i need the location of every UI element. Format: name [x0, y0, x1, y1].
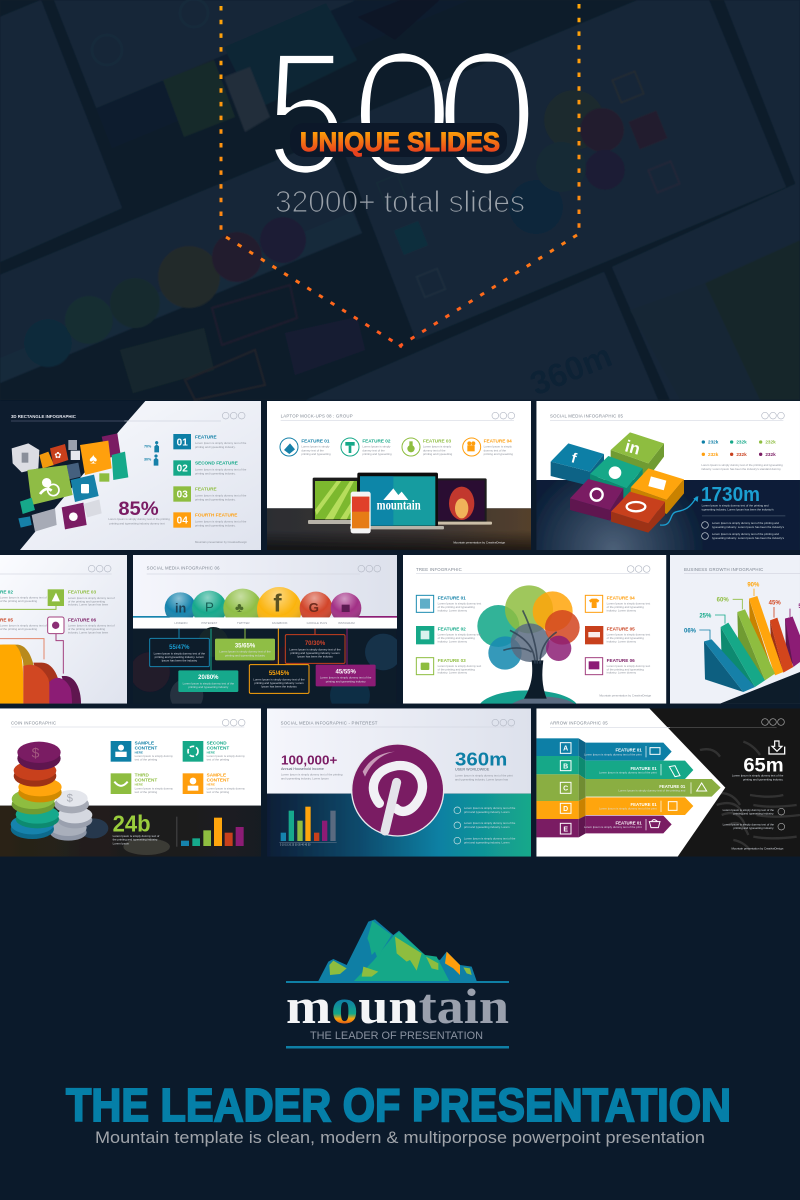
- feature rows: FEATURE: [195, 487, 217, 492]
- 65m stat: 65m: [743, 755, 784, 776]
- panel: 3D rectangle infographic slide: 3D RECTANGLE INFOGRAPHIC: [11, 414, 76, 419]
- content blocks: Lorem Ipsum is simply dummy: [207, 786, 245, 790]
- 3D cube cluster: ✿: [54, 450, 62, 460]
- percentage boxes: 55/47%: [169, 645, 190, 651]
- four feature icons: dummy text of the: [362, 448, 385, 452]
- 65m stat: Mountain presentation by CreativeDesign: [731, 847, 784, 851]
- panel: arrow infographic slide: ARROW INFOGRAPHIC 05: [550, 721, 608, 726]
- percentage boxes: 70/30%: [305, 641, 326, 647]
- percentage boxes: Lorem Ipsum is simply dummy text of the: [183, 681, 234, 685]
- 3D cube cluster: ♠: [89, 451, 97, 467]
- content blocks: CONTENT: [135, 745, 157, 750]
- panel: stacked dome features slide: Lorem Ipsum is simply dummy text of: [0, 624, 47, 628]
- four feature icons: FEATURE 04: [484, 439, 512, 444]
- feature rows: printing and typesetting industry.: [195, 523, 236, 527]
- panel: laptop mock-ups slide: [267, 401, 531, 550]
- panel: social media infographic 06 slide: INSTAGRAM: [338, 621, 355, 625]
- feature arrows: Lorem Ipsum is simply dummy text of the printing and: [618, 789, 686, 793]
- panel: 3D rectangle infographic slide: Mountain presentation by CreativeDesign: [195, 540, 247, 544]
- panel: pinterest infographic slide: [267, 708, 531, 857]
- 232k stats and 1730m figure: industry. Lorem Ipsum has been the industry's standard dummy: [701, 467, 781, 471]
- feature rows: Lorem Ipsum is simply dummy text of the: [195, 467, 247, 471]
- feature rows: Lorem Ipsum is simply dummy text of the: [195, 519, 247, 523]
- content blocks: CONTENT: [135, 777, 157, 782]
- 232k stats and 1730m figure: typesetting industry. Lorem Ipsum has been the industry's: [702, 507, 774, 511]
- right features: Lorem Ipsum is simply dummy text: [607, 602, 650, 606]
- panel: coin infographic slide: COIN INFOGRAPHIC: [11, 720, 56, 725]
- feature arrows: FEATURE 01: [659, 784, 686, 789]
- percentage boxes: Ipsum has been the industry: [162, 659, 198, 663]
- percentage boxes: printing and typesetting industry. Lorem: [290, 651, 340, 655]
- panel: stacked dome features slide: RE 05: [0, 618, 13, 623]
- headline: 500: 5: [266, 16, 347, 212]
- left features: industry. Lorem dummy: [438, 671, 468, 675]
- panel: stacked dome features slide: of the printing and typesetting: [0, 599, 38, 603]
- 24b stat: 24b: [113, 810, 151, 836]
- content blocks: SAMPLE: [207, 773, 226, 778]
- panel: social media infographic 06 slide: TWITTER: [237, 621, 250, 625]
- bar chart: 5 10 15 20 25 30 35 40 45 50: [280, 845, 311, 847]
- panel: pinterest infographic slide: SOCIAL MEDIA INFOGRAPHIC - PINTEREST: [281, 720, 378, 725]
- right features: Lorem Ipsum is simply dummy text: [607, 664, 650, 668]
- headline: 500: 0: [350, 15, 455, 211]
- four feature icons: dummy text of the: [301, 448, 324, 452]
- letter bands: C: [563, 785, 568, 792]
- bullet rows: print and typesetting industry. Lorem: [464, 810, 510, 814]
- percentage boxes: Lorem Ipsum is simply dummy text of the: [219, 650, 271, 654]
- 360m stat: [455, 752, 513, 781]
- feature rows: 04: [177, 516, 188, 527]
- panel: 3D rectangle infographic slide: 30%: [144, 458, 152, 462]
- bullet rows: Lorem Ipsum is simply dummy text of the: [464, 806, 516, 810]
- logo: mountain: [286, 919, 509, 1048]
- percentage boxes: Lorem Ipsum is simply dummy text of the: [289, 647, 341, 651]
- panel: social media infographic 06 slide: GOOGLE PLUS: [307, 621, 327, 625]
- content blocks: CONTENT: [207, 777, 229, 782]
- 65m stat: Lorem Ipsum is simply dummy text of the: [732, 773, 784, 777]
- 232k stats and 1730m figure: Lorem Ipsum is simply dummy text of the printing and typesetting: [701, 463, 783, 467]
- zebra texture: [700, 742, 800, 850]
- feature rows: Lorem Ipsum is simply dummy text of the: [195, 441, 247, 445]
- panel: coin infographic slide: Lorem Ipsum is simply dummy text of: [113, 834, 160, 838]
- feature rows: 03: [177, 490, 188, 501]
- 100,000+ stat: and typesetting industry. Lorem Ipsum: [281, 776, 329, 780]
- content blocks: Lorem Ipsum is simply dummy: [135, 786, 173, 790]
- right features: of the printing and typesetting: [607, 636, 644, 640]
- panel: stacked dome features slide: of the printing and typesetting: [68, 599, 106, 603]
- 65m stat: printing and typesetting industry.: [743, 777, 784, 781]
- feature rows: 01: [177, 437, 188, 448]
- four feature icons: Lorem Ipsum is simply: [484, 445, 512, 449]
- percentage labels: 45%: [769, 601, 781, 607]
- feature rows: FEATURE: [195, 434, 217, 439]
- social spheres: ♣: [235, 600, 244, 615]
- feature arrows: FEATURE 01: [631, 802, 657, 807]
- percentage boxes: 45/55%: [336, 669, 356, 675]
- heading: the leader of presentation: THE LEADER OF PRESENTATION: [66, 1079, 731, 1131]
- panel: laptop mock-ups slide: LAPTOP MOCK-UPS 08 : GROUP: [281, 414, 353, 419]
- four feature icons: printing and typesetting: [362, 452, 392, 456]
- panel: tree infographic slide: [403, 555, 666, 704]
- content blocks: text of the printing: [207, 758, 230, 762]
- four feature icons: printing and typesetting: [484, 452, 513, 456]
- letter bands: [536, 738, 586, 837]
- percentage boxes: printing and typesetting industry. Lorem: [254, 681, 304, 685]
- panel: stacked dome features slide: Lorem Ipsum is simply dummy text of: [68, 624, 115, 628]
- percentage boxes: printing and typesetting industry: [188, 685, 229, 689]
- left features: industry. Lorem dummy: [438, 608, 468, 612]
- right features: of the printing and typesetting: [607, 667, 644, 671]
- feature rows: [173, 434, 247, 528]
- percentage labels: [684, 583, 800, 640]
- devices: [308, 473, 492, 533]
- right features: FEATURE 06: [607, 658, 635, 663]
- 3D growth bars: [704, 596, 800, 704]
- four feature icons: FEATURE 01: [301, 439, 330, 444]
- tagline: Mountain template is clean, modern & multiporpose powerpoint presentation: [95, 1128, 705, 1147]
- panel: social media infographic 05 slide: [536, 401, 800, 550]
- letter bands: E: [563, 826, 568, 833]
- 65m stat: Lorem Ipsum is simply dummy text of the: [723, 822, 774, 826]
- content blocks: Lorem Ipsum is simply dummy: [207, 754, 245, 758]
- badge: unique slides: UNIQUE SLIDES: [300, 127, 500, 157]
- headline: 500: 0: [434, 15, 540, 211]
- panel: coin infographic slide: the printing and typesetting industry.: [113, 838, 158, 842]
- percentage boxes: printing and typesetting industry. Lorem: [155, 655, 205, 659]
- percentage boxes: Lorem Ipsum is simply dummy text of the: [253, 677, 305, 681]
- percentage boxes: Lorem Ipsum is simply dummy text of the: [154, 651, 205, 655]
- 360m stat: USER WORLDWIDE: [455, 768, 490, 772]
- panel: 3D rectangle infographic slide: [0, 401, 261, 550]
- panel: social media infographic 06 slide: FACEBOOK: [272, 621, 288, 625]
- percentage boxes: Lorem Ipsum is simply dummy text of the: [320, 676, 372, 680]
- tree: [477, 585, 580, 727]
- left features: Lorem Ipsum is simply dummy text: [438, 633, 481, 637]
- logo: mountain: mountain: [286, 978, 509, 1034]
- percentage boxes: Ipsum has been the industry: [261, 685, 297, 689]
- percentage boxes: printing and typesetting industry: [225, 653, 266, 657]
- letter bands: A: [563, 746, 568, 753]
- background: tilted slide collage: 360m: [525, 336, 617, 402]
- letter bands: B: [563, 763, 568, 770]
- bullet rows: print and typesetting industry. Lorem: [464, 825, 510, 829]
- left features: industry. Lorem dummy: [438, 639, 468, 643]
- panel: social media infographic 06 slide: LINKEDIN: [174, 621, 187, 625]
- four feature icons: Lorem Ipsum is simply: [362, 445, 391, 449]
- panel: laptop mock-ups slide: Mountain presentation by CreativeDesign: [453, 540, 506, 544]
- right features: [585, 595, 650, 675]
- 232k stats and 1730m figure: [660, 440, 785, 540]
- four feature icons: FEATURE 02: [362, 439, 391, 444]
- right features: industry. Lorem dummy: [607, 639, 637, 643]
- panel: stacked dome features slide: FEATURE 03: [68, 590, 97, 595]
- percentage labels: 25%: [699, 613, 712, 619]
- right features: Lorem Ipsum is simply dummy text: [607, 633, 650, 637]
- content blocks: [111, 741, 245, 794]
- social spheres: f: [273, 590, 282, 617]
- dome chart: [0, 645, 81, 704]
- panel: social media infographic 06 slide: [130, 555, 402, 715]
- subtitle: total slides: 32000+ total slides: [275, 184, 525, 219]
- feature arrows: FEATURE 01: [616, 820, 642, 825]
- 360m stat: Lorem Ipsum is simply dummy text of the print: [455, 774, 513, 778]
- bullet rows: Lorem Ipsum is simply dummy text of the: [464, 821, 516, 825]
- 100,000+ stat: Lorem Ipsum is simply dummy text of the printing: [281, 772, 343, 776]
- feature arrows: FEATURE 01: [631, 766, 657, 771]
- content blocks: HERE: [135, 751, 143, 755]
- panel: stacked dome features slide: industry. Lorem Ipsum has been: [68, 630, 109, 634]
- feature arrows: FEATURE 01: [616, 748, 642, 753]
- left features: [416, 595, 481, 675]
- content blocks: CONTENT: [207, 745, 229, 750]
- panel: coin infographic slide: [0, 708, 261, 857]
- panel: stacked dome features slide: [0, 555, 127, 704]
- four feature icons: dummy text of the: [484, 448, 507, 452]
- 65m stat: [723, 741, 785, 851]
- feature arrows: Lorem Ipsum is simply dummy text of the print: [599, 771, 657, 775]
- feature rows: SECOND FEATURE: [195, 461, 238, 466]
- bar chart: [177, 817, 244, 847]
- left features: FEATURE 01: [438, 596, 466, 601]
- devices: mountain: [377, 497, 421, 512]
- feature rows: 02: [177, 464, 188, 475]
- percentage boxes: printing and typesetting industry: [326, 679, 366, 683]
- 232k stats and 1730m figure: Lorem Ipsum is simply dummy text of the printing and: [712, 521, 779, 525]
- 360m stat: and typesetting industry. Lorem Ipsum has: [455, 778, 509, 782]
- feature arrows: Lorem Ipsum is simply dummy text of the print: [584, 752, 642, 756]
- 85% stat: 85%: [118, 499, 159, 520]
- panel: tree infographic slide: Mountain presentation by CreativeDesign: [599, 694, 652, 698]
- feature rows: printing and typesetting industry.: [195, 445, 236, 449]
- headline: 500: [266, 15, 540, 212]
- panel: social media infographic 06 slide: PINTEREST: [201, 621, 217, 625]
- 232k stats and 1730m figure: 1730m: [701, 484, 760, 506]
- four feature icons: printing and typesetting: [301, 452, 331, 456]
- percentage boxes: 55/45%: [269, 671, 290, 677]
- right features: FEATURE 04: [607, 596, 635, 601]
- 232k stats and 1730m figure: Lorem Ipsum is simply dummy text of the printing and: [712, 532, 779, 536]
- panel: 3D rectangle infographic slide: printing and typesetting industry dummy text: [109, 521, 165, 525]
- content blocks: text of the printing: [135, 790, 158, 794]
- percentage boxes: Ipsum has been the industry: [297, 655, 333, 659]
- 360m stat: 360m: [455, 749, 507, 770]
- icon: pinterest badge: [351, 743, 444, 837]
- coin stacks: $: [67, 793, 74, 805]
- isometric social tiles: in: [623, 437, 642, 459]
- right features: FEATURE 05: [607, 627, 635, 632]
- bar chart: [279, 807, 337, 847]
- panel: 3D rectangle infographic slide: 70%: [144, 444, 152, 448]
- right features: industry. Lorem dummy: [607, 608, 637, 612]
- 65m stat: printing and typesetting industry.: [733, 826, 774, 830]
- panel: arrow infographic slide: [536, 708, 800, 857]
- four feature icons: Lorem Ipsum is simply: [423, 445, 452, 449]
- panel: tree infographic slide: TREE INFOGRAPHIC: [416, 567, 462, 572]
- percentage boxes: 20/80%: [198, 675, 219, 681]
- right features: industry. Lorem dummy: [607, 671, 637, 675]
- 100,000+ stat: [281, 754, 343, 780]
- percentage boxes: 35/65%: [235, 643, 256, 649]
- panel: stacked dome features slide: RE 02: [0, 590, 13, 595]
- 232k stats and 1730m figure: 232k: [765, 440, 776, 445]
- feature arrows: Lorem Ipsum is simply dummy text of the print: [584, 825, 642, 829]
- background: tilted slide collage: [0, 0, 800, 402]
- logo: mountain: THE LEADER OF PRESENTATION: [310, 1030, 483, 1042]
- content blocks: text of the printing: [135, 758, 158, 762]
- content blocks: SECOND: [207, 741, 227, 746]
- panel: business growth infographic slide: BUSINESS GROWTH INFOGRAPHIC: [684, 567, 763, 572]
- content blocks: SAMPLE: [135, 741, 154, 746]
- panel: stacked dome features slide: Lorem Ipsum is simply dummy text of: [0, 596, 47, 600]
- content blocks: text of the printing: [207, 790, 230, 794]
- 232k stats and 1730m figure: 232k: [765, 452, 776, 457]
- feature rows: printing and typesetting industry.: [195, 497, 236, 501]
- left features: of the printing and typesetting: [438, 605, 475, 609]
- left features: of the printing and typesetting: [438, 667, 475, 671]
- panel: stacked dome features slide: FEATURE 06: [68, 618, 97, 623]
- 232k stats and 1730m figure: typesetting industry. Lorem Ipsum has been the industry's: [712, 536, 785, 540]
- 232k stats and 1730m figure: 232k: [708, 440, 719, 445]
- four feature icons: Lorem Ipsum is simply: [301, 445, 330, 449]
- feature rows: FOURTH FEATURE: [195, 513, 237, 518]
- 100,000+ stat: Annual Household Income: [281, 767, 324, 771]
- left features: Lorem Ipsum is simply dummy text: [438, 664, 481, 668]
- isometric social tiles: f: [570, 449, 579, 466]
- bullet rows: print and typesetting industry. Lorem: [464, 840, 510, 844]
- content blocks: THIRD: [135, 773, 150, 778]
- social spheres: G: [309, 600, 319, 615]
- content blocks: HERE: [207, 751, 215, 755]
- bullet rows: [454, 806, 516, 844]
- social spheres: [164, 587, 362, 618]
- dashed frame: [221, 4, 579, 347]
- left features: FEATURE 03: [438, 658, 466, 663]
- icon: mountain peaks: [318, 919, 477, 981]
- panel: business growth infographic slide: [670, 555, 800, 704]
- panel: social media infographic 06 slide: SOCIAL MEDIA INFOGRAPHIC 06: [147, 566, 220, 571]
- content blocks: HERE: [207, 783, 215, 787]
- left features: FEATURE 02: [438, 627, 466, 632]
- 232k stats and 1730m figure: typesetting industry. Lorem Ipsum has been the industry's: [712, 525, 785, 529]
- feature rows: printing and typesetting industry.: [195, 471, 236, 475]
- panel: coin infographic slide: Lorem Ipsum: [113, 841, 130, 845]
- feature arrows: Lorem Ipsum is simply dummy text of the print: [599, 807, 657, 811]
- content blocks: HERE: [135, 783, 143, 787]
- 232k stats and 1730m figure: Lorem Ipsum is simply dummy text of the printing and: [702, 503, 769, 507]
- panel: stacked dome features slide: of the printing and typesetting: [68, 627, 106, 631]
- bullet rows: Lorem Ipsum is simply dummy text of the: [464, 836, 516, 840]
- 65m stat: printing and typesetting industry.: [733, 812, 774, 816]
- panel: social media infographic 05 slide: SOCIAL MEDIA INFOGRAPHIC 05: [550, 414, 623, 419]
- social spheres: in: [175, 601, 186, 615]
- percentage boxes: [150, 635, 376, 693]
- four feature icons: printing and typesetting: [423, 452, 453, 456]
- left features: Lorem Ipsum is simply dummy text: [438, 602, 481, 606]
- 232k stats and 1730m figure: 232k: [736, 452, 747, 457]
- percentage labels: 06%: [684, 628, 697, 634]
- percentage labels: 90%: [747, 583, 760, 589]
- right features: of the printing and typesetting: [607, 605, 644, 609]
- feature arrows: [584, 743, 721, 833]
- coin stacks: $: [32, 745, 40, 761]
- isometric social tiles: [551, 432, 684, 533]
- coin stacks: [11, 742, 92, 841]
- 3D cube cluster: [12, 433, 128, 532]
- four feature icons: dummy text of the: [423, 448, 446, 452]
- 232k stats and 1730m figure: 232k: [736, 440, 747, 445]
- four feature icons: FEATURE 03: [423, 439, 452, 444]
- percentage labels: 60%: [717, 598, 729, 604]
- panel: 3D rectangle infographic slide: Lorem Ipsum is simply dummy text of the printing: [108, 517, 170, 521]
- connectors: [179, 629, 347, 670]
- 232k stats and 1730m figure: 232k: [708, 452, 719, 457]
- panel: stacked dome features slide: industry. Lorem Ipsum has been: [68, 603, 109, 607]
- left features: of the printing and typesetting: [438, 636, 475, 640]
- feature rows: Lorem Ipsum is simply dummy text of the: [195, 493, 247, 497]
- panel: stacked dome features slide: of the printing and typesetting: [0, 627, 38, 631]
- 100,000+ stat: 100,000+: [281, 754, 337, 768]
- social spheres: P: [205, 599, 214, 614]
- content blocks: Lorem Ipsum is simply dummy: [135, 754, 173, 758]
- four feature icons: [280, 438, 513, 456]
- panel: stacked dome features slide: Lorem Ipsum is simply dummy text of: [68, 596, 115, 600]
- letter bands: D: [563, 806, 568, 813]
- 65m stat: Lorem Ipsum is simply dummy text of the: [723, 808, 774, 812]
